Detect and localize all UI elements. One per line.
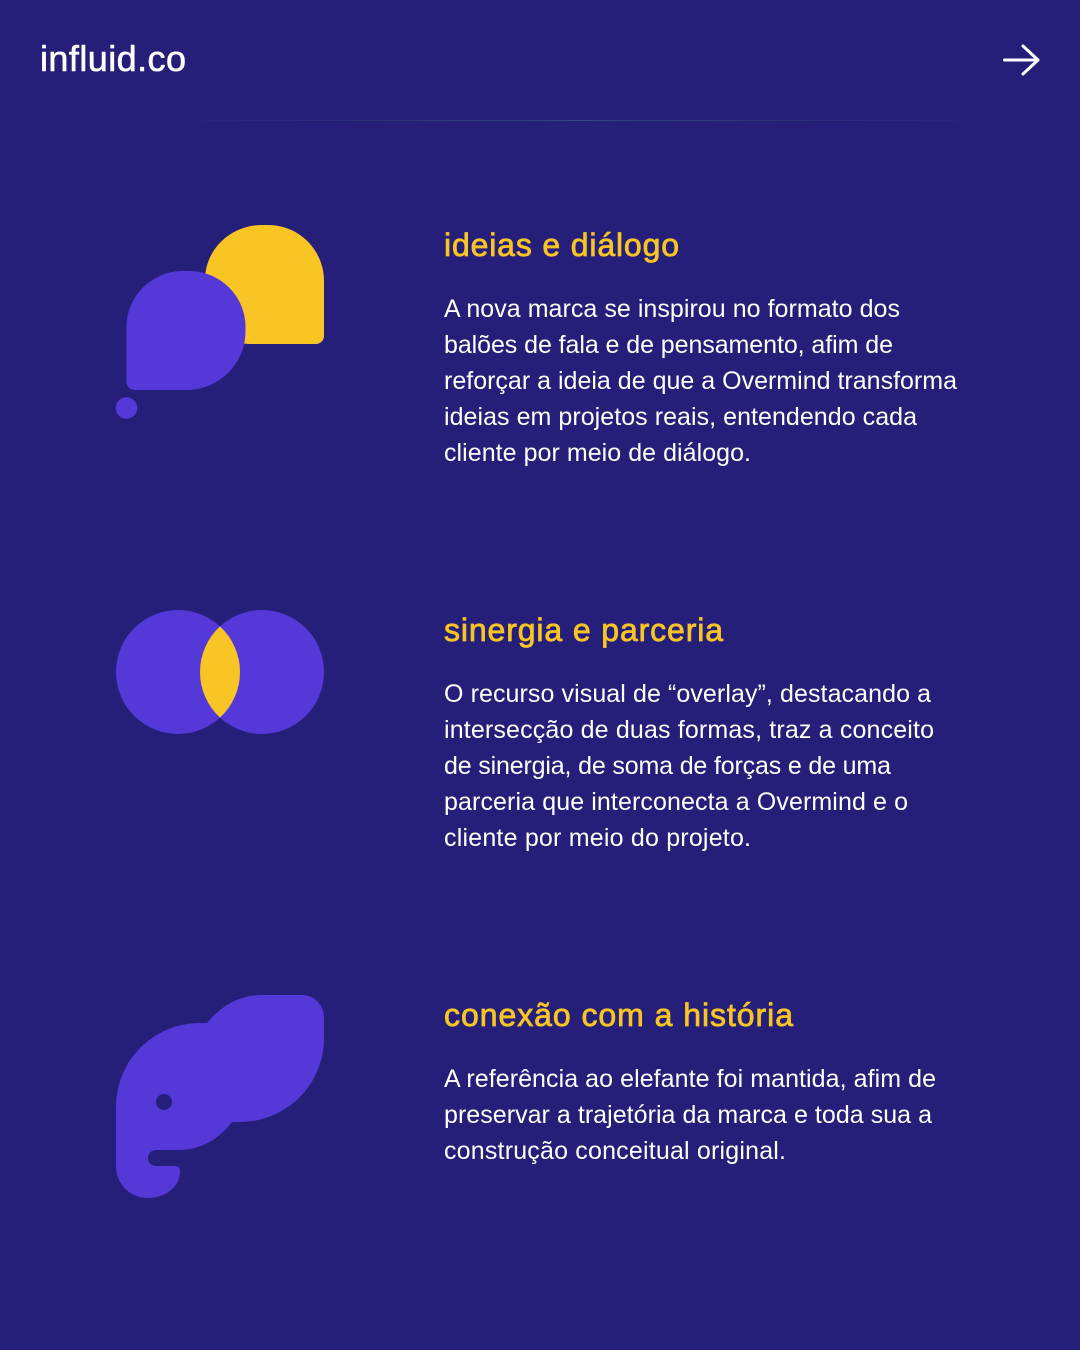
text block: preservar a trajetória da marca e toda sua a bbox=[444, 1101, 932, 1129]
text block: A referência ao elefante foi mantida, afim de bbox=[444, 1065, 936, 1093]
panel: conexão com a história bbox=[116, 995, 936, 1198]
panel: ideias e diálogo bbox=[116, 225, 957, 467]
text block bbox=[444, 680, 934, 852]
text block: cliente por meio de diálogo. bbox=[444, 439, 751, 467]
text block: A nova marca se inspirou no formato dos bbox=[444, 295, 900, 323]
icon: arrow bbox=[1004, 46, 1038, 74]
text block: construção conceitual original. bbox=[444, 1137, 786, 1165]
text block: ideias em projetos reais, entendendo cada bbox=[444, 403, 917, 431]
text block: intersecção de duas formas, traz a conceito bbox=[444, 716, 934, 744]
text block: O recurso visual de “overlay”, destacando a bbox=[444, 680, 931, 708]
text block bbox=[444, 1065, 936, 1165]
icon: elephant bbox=[116, 995, 324, 1198]
text block: de sinergia, de soma de forças e de uma bbox=[444, 752, 891, 780]
heading: conexão com a história bbox=[444, 997, 793, 1033]
text block: reforçar a ideia de que a Overmind transforma bbox=[444, 367, 957, 395]
text block: parceria que interconecta a Overmind e o bbox=[444, 788, 908, 816]
icon: speech bubbles bbox=[116, 225, 324, 419]
text block: cliente por meio do projeto. bbox=[444, 824, 751, 852]
heading: ideias e diálogo bbox=[444, 227, 679, 263]
heading: sinergia e parceria bbox=[444, 612, 723, 648]
logo: influid.co bbox=[40, 38, 186, 79]
panel: sinergia e parceria bbox=[116, 610, 934, 852]
text block bbox=[444, 295, 957, 467]
icon: overlapping circles bbox=[116, 610, 324, 734]
text block: balões de fala e de pensamento, afim de bbox=[444, 331, 893, 359]
